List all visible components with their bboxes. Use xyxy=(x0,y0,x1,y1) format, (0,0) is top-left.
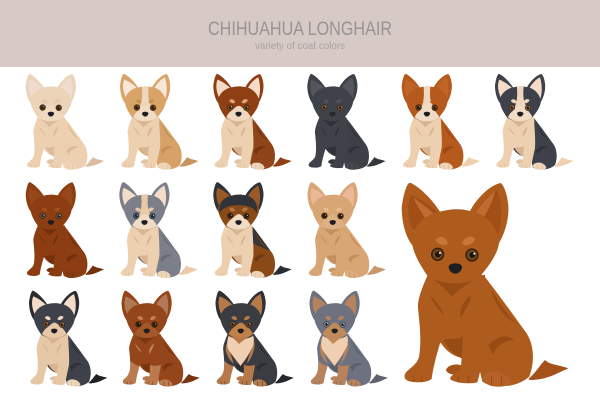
dog: black puppy xyxy=(307,74,386,170)
dog: black and cream puppy, bottom row xyxy=(29,291,107,387)
dog: black and cream puppy xyxy=(495,74,573,170)
dog: cream and tan puppy xyxy=(120,74,198,170)
dog: large red puppy xyxy=(402,183,568,387)
dog: red and cream puppy xyxy=(402,74,480,170)
header band xyxy=(0,0,600,67)
dog: fawn puppy xyxy=(307,182,386,278)
dog: chestnut and cream puppy xyxy=(213,74,292,170)
dog: black, tan and white puppy xyxy=(215,291,294,387)
dog: cream puppy xyxy=(26,74,104,170)
title: CHIHUAHUA LONGHAIR xyxy=(208,19,392,40)
dog: grey and cream puppy xyxy=(119,182,198,278)
dog: dark red puppy xyxy=(26,182,104,278)
dog: chocolate puppy with tan marks xyxy=(121,291,200,387)
dog: blue grey, tan and white puppy xyxy=(309,291,388,387)
dog: black and tan puppy xyxy=(213,182,292,278)
subtitle: variety of coat colors xyxy=(255,40,345,52)
